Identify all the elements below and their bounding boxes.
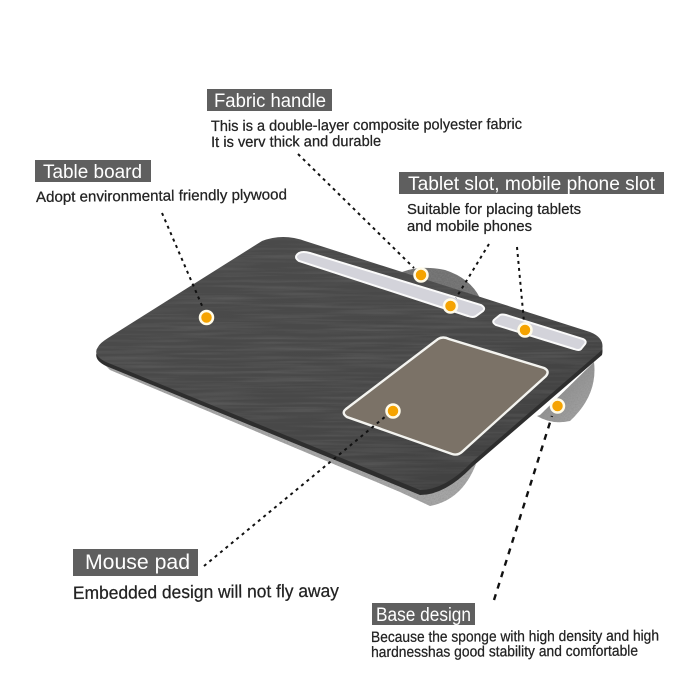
callout: fabric handle xyxy=(207,89,523,151)
connector: phone slot xyxy=(517,247,524,322)
heading: table board: Table board xyxy=(43,162,142,183)
text: tablet slot: and mobile phones xyxy=(407,218,532,235)
connector: table board xyxy=(162,213,203,308)
long tablet slot xyxy=(296,252,484,317)
table board top xyxy=(90,230,610,500)
callout: table board xyxy=(35,160,287,206)
heading: tablet slot: Tablet slot, mobile phone slot xyxy=(408,174,656,195)
right base cushion xyxy=(537,362,594,422)
text: tablet slot: Suitable for placing tablets xyxy=(407,201,581,218)
connector: base design xyxy=(494,416,552,600)
text: base design: Because the sponge with high density and high xyxy=(371,627,659,646)
text: tablet slot xyxy=(407,201,581,235)
text: fabric handle xyxy=(211,116,523,151)
connector: fabric handle xyxy=(298,154,414,268)
text: base design: hardnesshas good stability and comfortable xyxy=(371,643,638,661)
front base cushion xyxy=(100,358,480,508)
mouse pad xyxy=(344,338,548,455)
heading: fabric handle: Fabric handle xyxy=(214,91,326,112)
connector: tablet slot xyxy=(456,244,489,298)
connector: mouse pad xyxy=(204,416,386,566)
marker: table board xyxy=(200,311,213,324)
fabric handle xyxy=(402,268,480,297)
lap desk product xyxy=(90,230,610,508)
marker: tablet slot xyxy=(444,300,457,312)
board edge xyxy=(96,241,602,495)
callout: mouse pad xyxy=(73,549,339,603)
heading: base design: Base design xyxy=(376,605,471,626)
text: fabric handle: It is verv thick and durable xyxy=(211,133,381,151)
text: mouse pad: Embedded design will not fly away xyxy=(73,581,339,603)
callout: base design xyxy=(371,603,659,661)
text: fabric handle: This is a double-layer composite polyester fabric xyxy=(211,116,523,135)
heading: mouse pad: Mouse pad xyxy=(85,551,190,574)
marker: phone slot xyxy=(518,324,532,336)
marker: mouse pad xyxy=(386,404,400,418)
marker: base xyxy=(551,400,564,412)
marker: fabric handle xyxy=(414,268,428,282)
phone slot xyxy=(493,314,586,350)
text: base design xyxy=(371,627,659,661)
text: table board: Adopt environmental friendly plywood xyxy=(36,186,287,206)
callout: tablet and phone slot xyxy=(399,172,664,235)
